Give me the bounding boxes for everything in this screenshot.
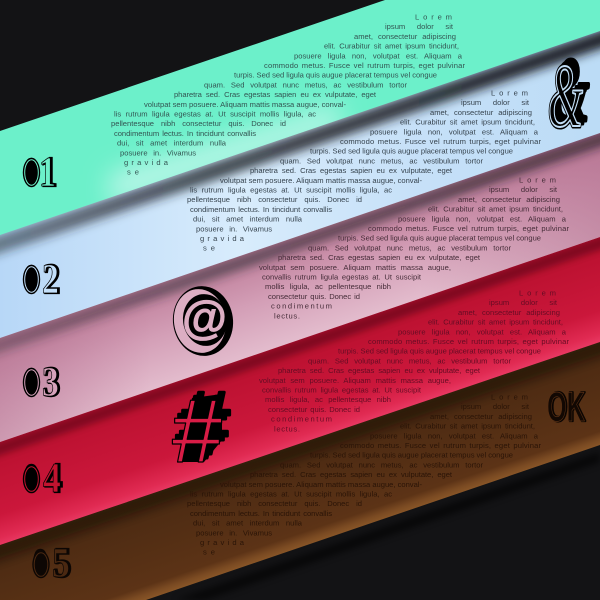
text block: ribbon 01: commodo metus. Fusce vel rutrum turpis, eget pulvinar <box>264 61 465 70</box>
text block: ribbon 01: gravida <box>124 158 169 167</box>
text block: ribbon 04: posuere ligula non, volutpat est. Aliquam a <box>398 327 567 336</box>
text block: ribbon 03: elit. Curabitur sit amet ipsum tincidunt, <box>428 205 563 214</box>
text block: ribbon 05: gravida <box>200 538 245 547</box>
text block: ribbon 02: amet, consectetur adipiscing <box>430 108 532 117</box>
number 04: 4 <box>45 455 63 502</box>
text block: ribbon 05: commodo metus. Fusce vel rutrum turpis, eget pulvinar <box>340 441 541 450</box>
text block: ribbon 05: pellentesque nibh consectetur quis. Donec id <box>187 499 362 508</box>
text block: ribbon 02: Lorem <box>491 88 528 98</box>
text block: ribbon 02: pellentesque nibh consectetur quis. Donec id <box>187 195 362 204</box>
text block: ribbon 03: quam. Sed volutpat nunc metus, ac vestibulum tortor <box>308 243 511 252</box>
text block: ribbon 05: elit. Curabitur sit amet ipsum tincidunt, <box>400 422 535 431</box>
panel: ribbon 05 brown <box>0 290 600 600</box>
text block: ribbon 02: elit. Curabitur sit amet ipsum tincidunt, <box>400 118 535 127</box>
text block: ribbon 03: turpis. Sed sed ligula quis augue placerat tempus vel congue <box>338 234 541 243</box>
text block: ribbon 03: mollis ligula, ac pellentesque nibh <box>265 282 391 291</box>
text block: ribbon 02: posuere in. Vivamus <box>196 224 272 233</box>
icon: hash: # <box>180 374 230 474</box>
text block: ribbon 05: dui, sit amet interdum nulla <box>193 519 303 528</box>
text block: ribbon 02: lis rutrum ligula egestas at. Ut suscipit mollis ligula, ac <box>190 186 392 194</box>
number 02: 2 <box>42 257 59 303</box>
number 01: 1 <box>39 150 56 196</box>
text block: ribbon 01: posuere in. Vivamus <box>120 148 196 157</box>
text block: ribbon 02: dui, sit amet interdum nulla <box>193 215 303 224</box>
number 03: 3 <box>42 360 59 406</box>
number 05: 0 <box>32 541 49 587</box>
text block: ribbon 04 <box>259 288 569 433</box>
text block: ribbon 01 <box>111 12 465 177</box>
text block: ribbon 03: consectetur quis. Donec id <box>268 292 360 301</box>
text block: ribbon 03: convallis rutrum ligula egestas at. Ut suscipit <box>262 272 422 282</box>
icon: ampersand: & <box>551 45 586 143</box>
text block: ribbon 05: quam. Sed volutpat nunc metus, ac vestibulum tortor <box>280 460 483 469</box>
text block: ribbon 03: Lorem <box>519 176 556 184</box>
number 04: 0 <box>23 456 40 502</box>
panel: ribbon 01 mint <box>0 0 600 260</box>
text block: ribbon 05: se <box>203 548 215 557</box>
text block: ribbon 01: elit. Curabitur sit amet ipsum tincidunt, <box>324 42 459 51</box>
text block: ribbon 04: consectetur quis. Donec id <box>268 405 360 414</box>
text block: ribbon 05: Lorem <box>491 392 528 402</box>
text block: ribbon 03: condimentum <box>271 302 332 311</box>
text block: ribbon 05: pharetra sed. Cras egestas sapien eu ex vulputate, eget <box>250 470 453 479</box>
text block: ribbon 05: posuere ligula non, volutpat est. Aliquam a <box>370 431 539 440</box>
icon: at sign: @ <box>182 291 227 343</box>
number 01: 1 <box>41 150 57 196</box>
text block: ribbon 01: dui, sit amet interdum nulla <box>117 139 227 148</box>
text block: ribbon 01: amet, consectetur adipiscing <box>354 32 456 41</box>
text block: ribbon 01: ipsum dolor sit <box>385 22 454 31</box>
icon: hash: # <box>172 382 222 482</box>
text block: ribbon 02: volutpat sem posuere. Aliquam mattis massa augue, conval- <box>220 176 422 185</box>
text block: ribbon 01: posuere ligula non, volutpat est. Aliquam a <box>294 51 463 60</box>
number 05 <box>32 540 72 587</box>
number 01: 0 <box>23 150 40 196</box>
text block: ribbon 04: pharetra sed. Cras egestas sapien eu ex vulputate, eget <box>278 366 481 375</box>
text block: ribbon 02: posuere ligula non, volutpat est. Aliquam a <box>370 127 539 136</box>
text block: ribbon 02: gravida <box>200 234 245 243</box>
icon: OK: OK <box>547 385 585 431</box>
text block: ribbon 04: turpis. Sed sed ligula quis augue placerat tempus vel congue <box>338 347 541 356</box>
text block: ribbon 05 <box>187 392 541 557</box>
text block: ribbon 05: turpis. Sed sed ligula quis augue placerat tempus vel congue <box>310 451 513 460</box>
text block: ribbon 04: quam. Sed volutpat nunc metus, ac vestibulum tortor <box>308 356 511 365</box>
text block: ribbon 04: amet, consectetur adipiscing <box>458 308 560 317</box>
text block: ribbon 02 <box>187 88 541 253</box>
panel: ribbon 04 red <box>0 190 600 565</box>
text block: ribbon 01: lis rutrum ligula egestas at. Ut suscipit mollis ligula, ac <box>114 110 316 118</box>
number 05: 5 <box>52 540 70 587</box>
icon: OK: OK <box>548 385 586 431</box>
text block: ribbon 01: pellentesque nibh consectetur quis. Donec id <box>111 119 286 128</box>
text block: ribbon 02: commodo metus. Fusce vel rutrum turpis, eget pulvinar <box>340 137 541 146</box>
text block: ribbon 02: turpis. Sed sed ligula quis augue placerat tempus vel congue <box>310 147 513 156</box>
number 03: 0 <box>23 360 40 406</box>
text block: ribbon 01: volutpat sem posuere. Aliquam mattis massa augue, conval- <box>144 100 346 109</box>
text block: ribbon 05: amet, consectetur adipiscing <box>430 412 532 421</box>
text block: ribbon 02: pharetra sed. Cras egestas sapien eu ex vulputate, eget <box>250 166 453 175</box>
text block: ribbon 05: lis rutrum ligula egestas at. Ut suscipit mollis ligula, ac <box>190 490 392 498</box>
text block: ribbon 02: quam. Sed volutpat nunc metus, ac vestibulum tortor <box>280 156 483 165</box>
number 04: 4 <box>43 455 61 502</box>
text block: ribbon 04: commodo metus. Fusce vel rutrum turpis, eget pulvinar <box>368 337 569 346</box>
text block: ribbon 04: condimentum <box>271 415 332 424</box>
text block: ribbon 01: Lorem <box>415 12 452 22</box>
text block: ribbon 02: ipsum dolor sit <box>461 98 530 107</box>
text block: ribbon 05: condimentum lectus. In tincidunt convallis <box>190 509 332 518</box>
number 03 <box>23 360 60 406</box>
panel: ribbon 03 pink <box>0 90 600 462</box>
text block: ribbon 04: elit. Curabitur sit amet ipsum tincidunt, <box>428 318 563 327</box>
text block: ribbon 03: commodo metus. Fusce vel rutrum turpis, eget pulvinar <box>368 224 569 233</box>
text block: ribbon 01: se <box>127 168 139 177</box>
text block: ribbon 04: lectus. <box>274 424 300 433</box>
panel: ribbon 02 light blue <box>0 0 600 359</box>
text block: ribbon 03: volutpat sem posuere. Aliquam mattis massa augue, <box>259 263 451 272</box>
icon: ampersand: & <box>554 42 589 140</box>
text block: ribbon 03: lectus. <box>274 311 300 320</box>
icon: ampersand: & <box>548 48 583 146</box>
icon: ampersand: & <box>548 48 583 146</box>
text block: ribbon 01: condimentum lectus. In tincidunt convallis <box>114 129 256 138</box>
text block: ribbon 05: posuere in. Vivamus <box>196 528 272 537</box>
text block: ribbon 04: Lorem <box>519 288 556 298</box>
text block: ribbon 01: quam. Sed volutpat nunc metus, ac vestibulum tortor <box>204 80 407 89</box>
text block: ribbon 03 <box>259 176 569 320</box>
icon: at sign <box>168 282 238 360</box>
text block: ribbon 04: convallis rutrum ligula egestas at. Ut suscipit <box>262 386 422 394</box>
text block: ribbon 03: ipsum dolor sit <box>489 185 558 194</box>
number 02: 0 <box>23 257 40 303</box>
text block: ribbon 02: condimentum lectus. In tincidunt convallis <box>190 205 332 214</box>
text block: ribbon 01: pharetra sed. Cras egestas sapien eu ex vulputate, eget <box>174 90 377 99</box>
text block: ribbon 05: ipsum dolor sit <box>461 402 530 411</box>
text block: ribbon 03: pharetra sed. Cras egestas sapien eu ex vulputate, eget <box>278 253 481 262</box>
text block: ribbon 04: ipsum dolor sit <box>489 298 558 307</box>
number 05: 5 <box>54 540 72 587</box>
icon: hash: # <box>176 378 226 478</box>
text block: ribbon 05: volutpat sem posuere. Aliquam mattis massa augue, conval- <box>220 480 422 489</box>
number 01 <box>23 150 57 196</box>
number 02 <box>23 257 60 303</box>
text block: ribbon 03: amet, consectetur adipiscing <box>458 195 560 204</box>
text block: ribbon 03: posuere ligula non, volutpat est. Aliquam a <box>398 214 567 223</box>
number 02: 2 <box>44 257 60 303</box>
number 04 <box>23 455 63 502</box>
text block: ribbon 04: mollis ligula, ac pellentesque nibh <box>265 395 391 404</box>
text block: ribbon 02: se <box>203 244 215 253</box>
text block: ribbon 01: turpis. Sed sed ligula quis augue placerat tempus vel congue <box>234 71 437 80</box>
number 03: 3 <box>44 360 60 406</box>
text block: ribbon 04: volutpat sem posuere. Aliquam mattis massa augue, <box>259 376 451 385</box>
